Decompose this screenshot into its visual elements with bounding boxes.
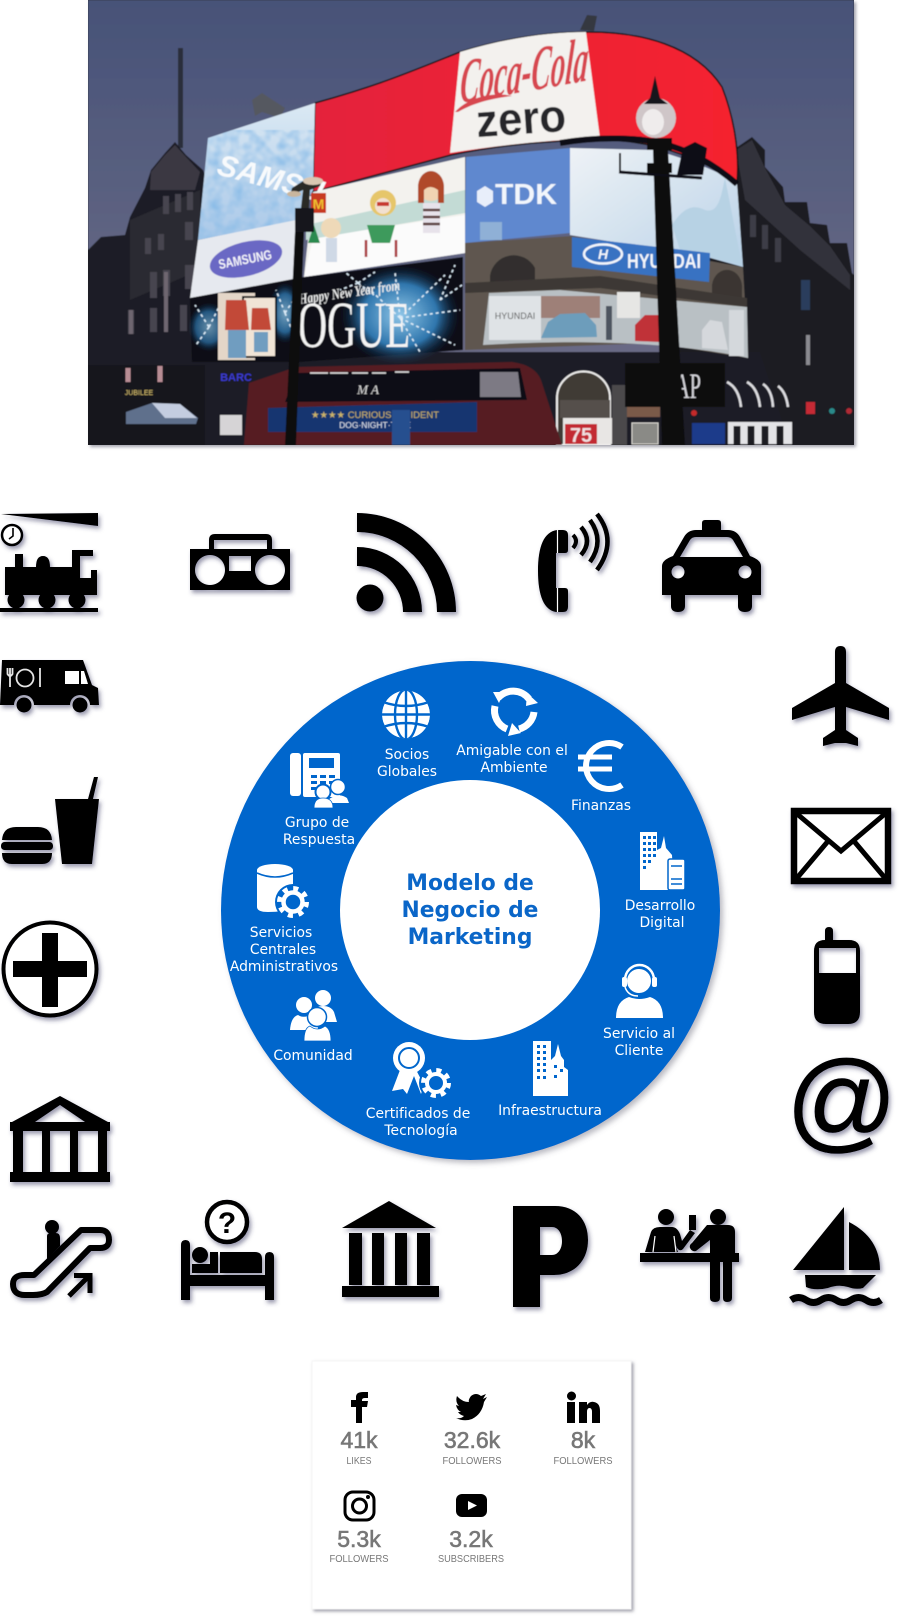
item: Infraestructura: Infraestructura [498,1103,602,1119]
counter: Instagram: FOLLOWERS [330,1553,388,1565]
center title: Negocio de [402,898,538,923]
item: Servicios Centrales Administrativos [230,864,338,975]
right building [678,136,854,445]
icon: at sign: @ [784,1039,896,1162]
panel: social media counters [312,1361,631,1609]
magazines [218,293,255,360]
icon: envelope [794,811,888,881]
left building [88,142,206,366]
photo: Piccadilly Circus billboards: JUBILEE [125,390,154,397]
counter: LinkedIn [554,1392,612,1467]
item: Amigable con el Ambiente: Amigable con el [456,743,568,759]
samsung upper panel [198,103,315,240]
icon: telephone ringing [538,514,608,612]
icon: boombox [190,534,290,590]
item: Infraestructura [498,1041,602,1119]
icon: airplane [792,646,889,746]
item: Desarrollo Digital [625,832,695,931]
icon: mobile phone [814,927,860,1024]
counter: Facebook: LIKES [346,1455,372,1467]
car ad [483,290,748,358]
photo: Piccadilly Circus billboards [88,0,854,447]
icon: bed with question mark: ? [218,1207,236,1240]
item: Grupo de Respuesta: Grupo de [285,815,349,831]
icon: train station [0,513,98,612]
double decker bus [244,362,562,445]
center title: Modelo de [406,871,534,896]
counter: Instagram [330,1492,388,1565]
center title [402,871,538,950]
counter: Instagram: 5.3k [337,1526,381,1552]
icon: burger and drink [1,777,99,864]
facade behind hyundai [465,236,748,358]
left building windows [128,192,194,334]
kids panel [304,157,465,277]
right light panel [570,148,743,267]
item: Amigable con el Ambiente: Ambiente [480,760,548,776]
counter: Facebook: 41k [340,1427,378,1453]
photo: Piccadilly Circus billboards: zero [474,89,568,147]
photo: Piccadilly Circus billboards: AP [675,366,701,406]
counter: YouTube: 3.2k [449,1526,493,1552]
photo: Piccadilly Circus billboards: ★★★★ CURIOUS INCIDENT [311,410,439,421]
item: Certificados de Tecnología: Tecnología [383,1123,458,1139]
item: Desarrollo Digital: Desarrollo [625,898,695,914]
photo: Piccadilly Circus billboards: SAMSUNG [217,247,273,272]
sky [88,0,854,353]
mast [178,48,183,148]
counter: LinkedIn: FOLLOWERS [554,1455,612,1467]
counter: Facebook [340,1392,378,1467]
item: Servicio al Cliente: Servicio al [603,1026,675,1042]
samsung lower panel [190,220,296,298]
icon: medical cross [4,922,96,1016]
item: Servicio al Cliente [603,965,675,1059]
counter: LinkedIn: 8k [571,1427,596,1453]
item: Finanzas [571,743,631,814]
icon: bed with question mark [181,1202,274,1300]
photo: Piccadilly Circus billboards: OGUE [298,289,410,362]
item: Desarrollo Digital: Digital [639,915,685,931]
photo: Piccadilly Circus billboards: HYUNDAI [495,311,535,321]
counter: YouTube: SUBSCRIBERS [438,1553,504,1565]
photo: Piccadilly Circus billboards: H [598,246,609,262]
icon: parking P [513,1206,588,1307]
photo: Piccadilly Circus billboards: HYUNDAI [627,251,701,273]
counter: Twitter: FOLLOWERS [442,1455,502,1467]
street lamp left [285,232,304,445]
item: Comunidad [273,990,353,1064]
counter: YouTube [438,1494,504,1565]
item: Finanzas: Finanzas [571,798,631,814]
icon: food truck [0,660,99,712]
photo: Piccadilly Circus billboards: Happy New Year from [297,278,401,308]
vogue panel [190,257,463,362]
photo: Piccadilly Circus billboards: M [313,196,324,212]
lower storefront [557,372,610,445]
icon: RSS feed [356,513,456,612]
hyundai banner [572,237,710,282]
item: Servicios Centrales Administrativos: Servicios [250,925,312,941]
item: Socios Globales: Globales [377,764,437,780]
item: Certificados de Tecnología: Certificados de [366,1106,470,1122]
photo: Piccadilly Circus billboards: M A [356,382,379,397]
cameras [252,93,285,118]
item: Grupo de Respuesta: Respuesta [283,832,355,848]
item: Servicios Centrales Administrativos: Centrales [250,942,316,958]
item: Amigable con el Ambiente [456,691,568,776]
icon: taxi [662,520,761,612]
red band [313,32,738,192]
counter: Twitter: 32.6k [444,1427,501,1453]
photo: Piccadilly Circus billboards: BARC [220,372,252,384]
coke panel [450,32,600,153]
counter: Twitter [442,1394,502,1467]
icon: reception desk [640,1209,739,1302]
item: Servicio al Cliente: Cliente [615,1043,663,1059]
item: Socios Globales [377,689,437,780]
photo: Piccadilly Circus billboards: SAMSU [214,149,328,209]
item: Comunidad: Comunidad [273,1048,353,1064]
photo: Piccadilly Circus billboards: TDK [495,179,557,211]
icon: museum solid [342,1201,439,1297]
item: Servicios Centrales Administrativos: Administrativos [230,959,338,975]
photo: Piccadilly Circus billboards: 75 [570,425,592,447]
item: Socios Globales: Socios [385,747,429,763]
icon: escalator [13,1220,109,1296]
TDK panel [465,148,570,243]
icon: museum outline [10,1096,110,1182]
item: Grupo de Respuesta [283,753,355,848]
icon: sailboat [791,1207,881,1302]
item: Certificados de Tecnología [366,1042,470,1139]
photo: Piccadilly Circus billboards: Coca-Cola [458,24,591,117]
center title: Marketing [408,925,532,950]
street lamp right [653,150,685,445]
awning [126,403,198,424]
storefront base [206,351,684,445]
photo: Piccadilly Circus billboards: DOG·NIGHT·TIME [339,420,411,430]
panel: marketing business model ring [221,661,720,1160]
